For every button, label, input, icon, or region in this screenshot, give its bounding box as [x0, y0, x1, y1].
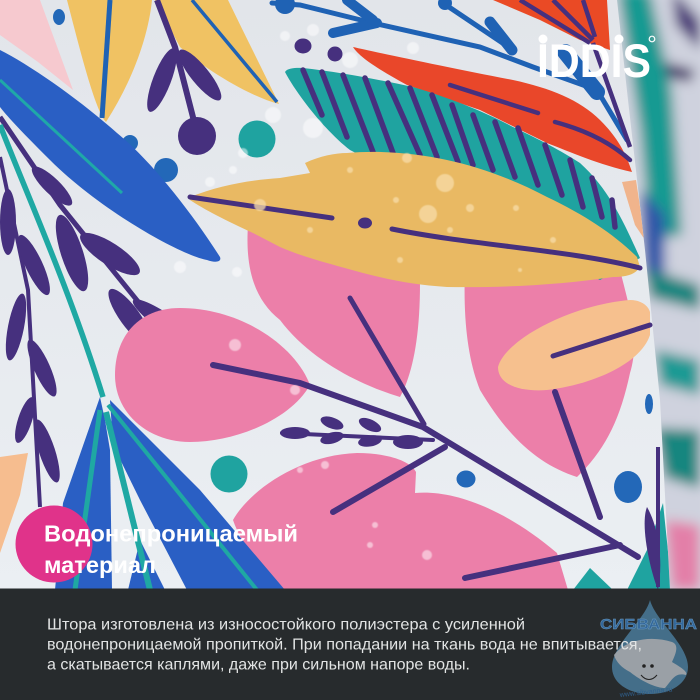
watermark: сибванна: www.sibvanna.ru — [618, 686, 673, 699]
peach leaf right — [498, 300, 650, 390]
pink shape left — [115, 308, 310, 442]
description text: а скатывается каплями, даже при сильном напоре воды. — [47, 656, 470, 674]
red-orange leaf — [353, 47, 632, 172]
callout pink circle — [16, 506, 92, 582]
blurred curtain fold on the right — [610, 0, 700, 600]
description text — [47, 616, 642, 674]
peach edge leaf — [622, 180, 645, 240]
right bottom leaves — [573, 447, 672, 590]
water droplets on fabric — [174, 24, 432, 560]
top leaf: yellow — [67, 0, 279, 122]
teal circle — [210, 456, 248, 492]
callout title: материал — [44, 552, 156, 578]
callout title: Водонепроницаемый — [44, 520, 298, 546]
teal stem — [0, 125, 103, 397]
purple branch and left sprig — [0, 116, 162, 508]
blue dot top — [53, 9, 65, 25]
pink shape right — [465, 270, 634, 477]
water droplets on yellow leaf — [254, 153, 556, 272]
callout title — [44, 520, 298, 578]
watermark: сибванна: СИБВАННА — [600, 616, 697, 633]
logo: iddis: IDDIS — [537, 34, 651, 87]
central purple branches — [213, 298, 638, 578]
top-right fronds — [272, 0, 627, 140]
blue dots right — [456, 394, 653, 503]
dots near berry — [122, 38, 342, 182]
yellow central leaf — [190, 152, 640, 287]
lavender sprig — [280, 414, 423, 449]
big blue leaf — [0, 50, 220, 262]
pink shape bottom — [233, 453, 568, 590]
pink shape upper — [247, 225, 420, 397]
top-left leaf: pink — [0, 0, 73, 90]
description text: водонепроницаемой пропиткой. При попадании на ткань вода не впитывается, — [47, 636, 642, 654]
description panel — [0, 588, 700, 700]
watermark: сибванна — [600, 600, 697, 699]
description text: Штора изготовлена из износостойкого полиэстера с усиленной — [47, 616, 525, 634]
bottom blue leaves — [55, 397, 285, 590]
orange frond top — [493, 0, 630, 147]
teal striped leaf — [285, 68, 640, 280]
peach leaf bottom-left — [0, 453, 28, 553]
purple sprig with berry — [147, 0, 222, 155]
